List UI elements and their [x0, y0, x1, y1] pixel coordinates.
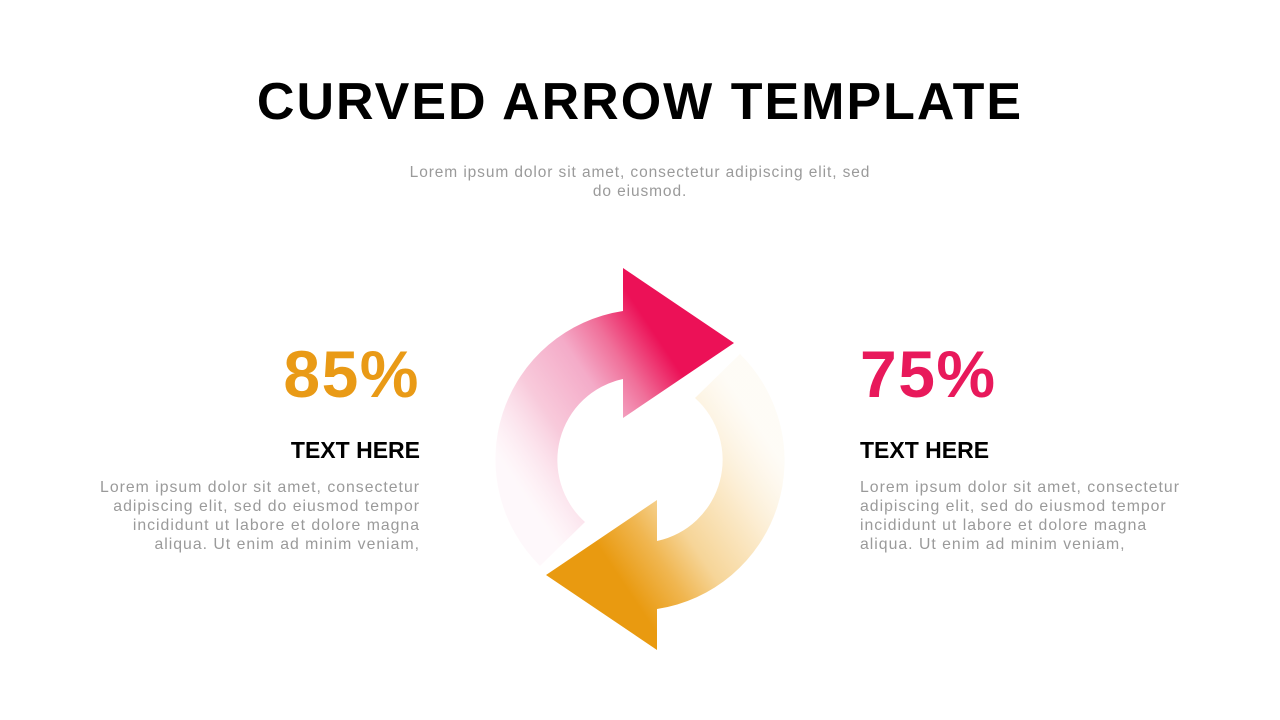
left percentage: 85% — [283, 337, 420, 411]
right body text: incididunt ut labore et dolore magna — [860, 517, 1147, 534]
right percentage: 75% — [860, 337, 997, 411]
left body text: incididunt ut labore et dolore magna — [133, 517, 420, 534]
subtitle: Lorem ipsum dolor sit amet, consectetur adipiscing elit, sed — [410, 164, 870, 181]
orange arrow — [546, 354, 785, 650]
title: CURVED ARROW TEMPLATE — [257, 73, 1023, 131]
left body text: aliqua. Ut enim ad minim veniam, — [154, 536, 420, 553]
right heading: TEXT HERE — [860, 437, 989, 463]
left heading: TEXT HERE — [291, 437, 420, 463]
right body text — [860, 479, 1180, 553]
left body text — [100, 479, 420, 553]
left body text: adipiscing elit, sed do eiusmod tempor — [113, 498, 420, 515]
pink arrow — [495, 268, 734, 566]
left body text: Lorem ipsum dolor sit amet, consectetur — [100, 479, 420, 496]
right body text: aliqua. Ut enim ad minim veniam, — [860, 536, 1126, 553]
subtitle — [410, 164, 870, 200]
right body text: adipiscing elit, sed do eiusmod tempor — [860, 498, 1167, 515]
subtitle: do eiusmod. — [593, 183, 687, 200]
right body text: Lorem ipsum dolor sit amet, consectetur — [860, 479, 1180, 496]
